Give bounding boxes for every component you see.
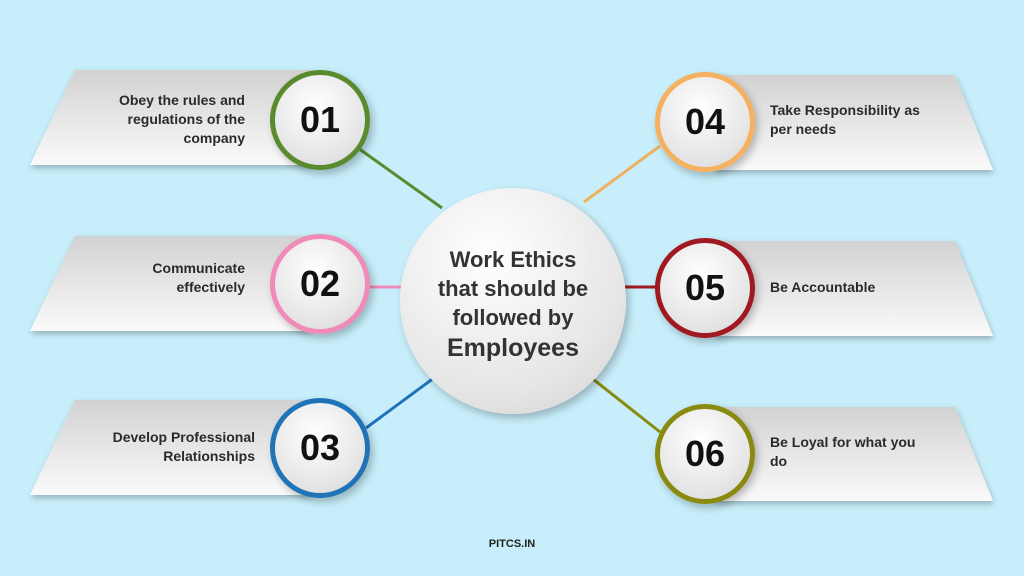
- text 02: Communicate effectively: [152, 260, 245, 295]
- center circle: Employees: [447, 334, 579, 362]
- text 06: Be Loyal for what you do: [770, 434, 915, 469]
- circle 02: [270, 234, 370, 334]
- center circle: followed by: [452, 305, 573, 330]
- circle 05: 05: [685, 267, 725, 308]
- center circle: that should be: [438, 276, 588, 301]
- text 05: Be Accountable: [770, 279, 875, 295]
- center circle: Work Ethics: [450, 247, 576, 272]
- text 01: Obey the rules and regulations of the company: [119, 92, 245, 146]
- circle 03: [270, 398, 370, 498]
- circle 01: 01: [300, 99, 340, 140]
- circle 02: 02: [300, 263, 340, 304]
- circle 04: 04: [685, 101, 725, 142]
- circle 01: [270, 70, 370, 170]
- text 04: Take Responsibility as per needs: [770, 102, 920, 137]
- circle 06: 06: [685, 433, 725, 474]
- circle 05: [655, 238, 755, 338]
- text 03: Develop Professional Relationships: [113, 429, 255, 464]
- circle 06: [655, 404, 755, 504]
- circle 04: [655, 72, 755, 172]
- footer: PITCS.IN: [489, 538, 535, 550]
- center circle: [400, 188, 626, 414]
- circle 03: 03: [300, 427, 340, 468]
